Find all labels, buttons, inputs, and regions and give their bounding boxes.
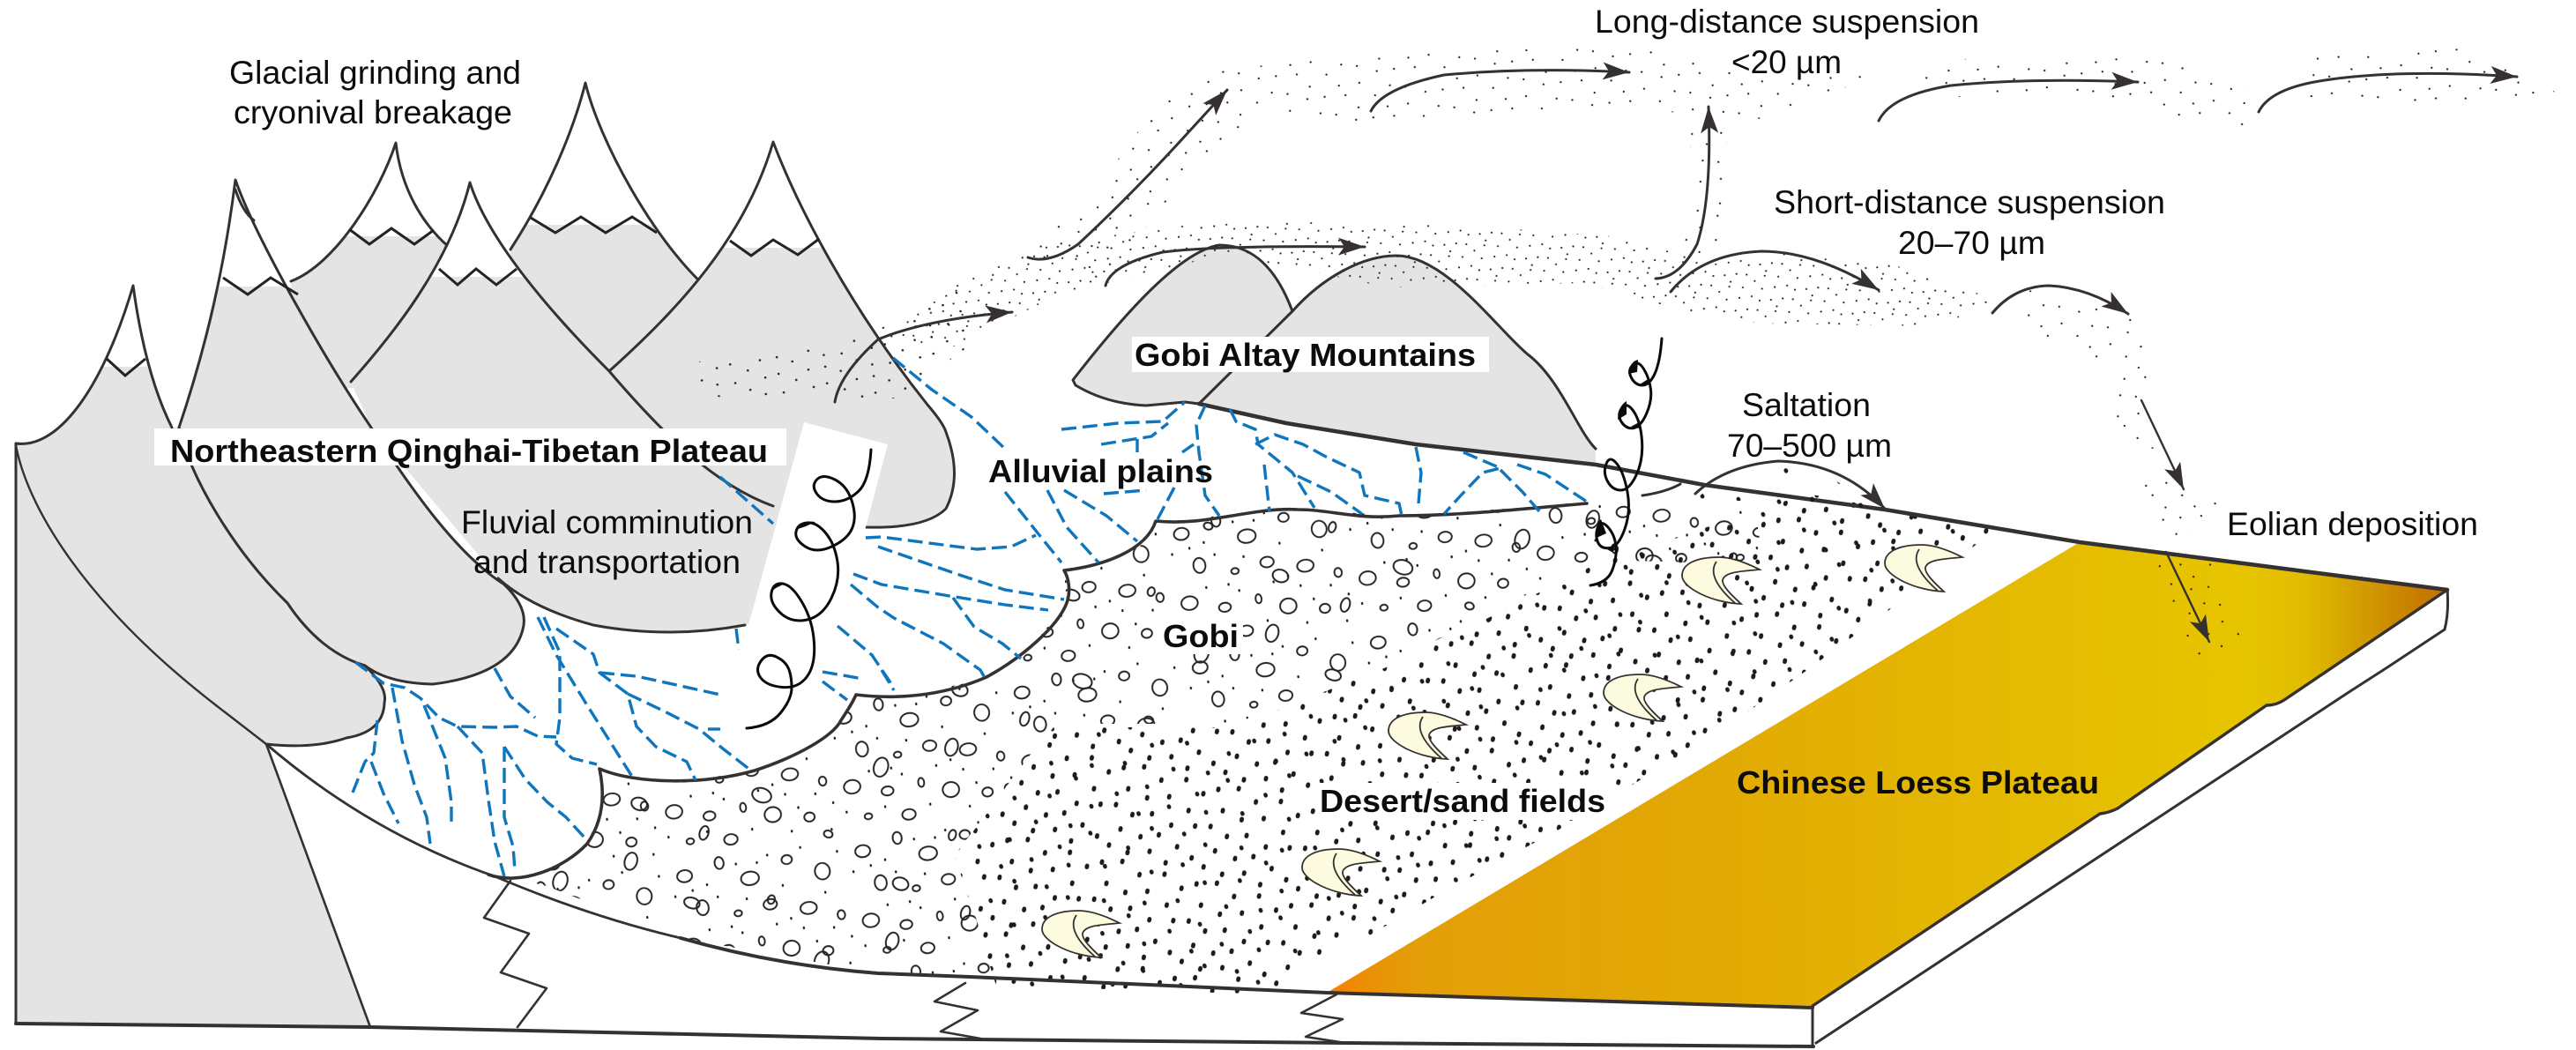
panel: barchan dunes [1042,545,1962,957]
panel: dust cloud - source [699,282,979,398]
arrow: long-distance suspension 1 [1371,71,1629,111]
panel: wind and transport arrows [835,71,2517,642]
arrow: short-distance suspension 2 [1992,286,2128,314]
label: Fluvial comminution and transportation: Fluvial comminution [461,504,753,540]
label: Saltation: 70–500 µm [1727,428,1892,464]
arrow: long-distance suspension 3 [2259,73,2517,112]
label: Short-distance suspension: Short-distance suspension [1774,184,2165,220]
panel: white band behind western whirlwind [748,422,888,639]
arrow: dust rising from plateau [835,312,1012,402]
panel: Northeastern Qinghai-Tibetan Plateau mountains [16,83,954,1027]
label: Chinese Loess Plateau: Chinese Loess Plateau [1737,764,2099,801]
panel: sparse dust - eolian deposition [2133,463,2250,657]
label: Saltation: Saltation [1742,387,1871,423]
label: Short-distance suspension: 20–70 µm [1898,225,2045,261]
icon: eastern whirlwind [1590,339,1662,585]
label: Northeastern Qinghai-Tibetan Plateau: Northeastern Qinghai-Tibetan Plateau [170,433,768,469]
label: Desert/sand fields: Desert/sand fields [1320,783,1605,819]
panel: dust band - short-distance suspension [882,220,1997,346]
label: Gobi: Gobi [1163,618,1239,654]
panel: saltation sand under arc [1697,464,1878,510]
panel: sparse dust - long-distance suspension [1023,48,2565,282]
icon: western whirlwind [747,450,871,728]
panel: gobi gravel field [513,503,1763,979]
arrow: rising to long-distance suspension [1028,90,1227,259]
panel: dust band - falling toward the plateau [2019,287,2157,450]
mountain: back peak centre-left [291,143,449,388]
panel: landscape outlines and slab edges [16,404,2448,1046]
label: Long-distance suspension [1595,4,1979,80]
panel: Chinese Loess Plateau surface [1327,542,2447,1006]
mountain: middle finger [351,182,793,632]
label: Fluvial comminution and transportation [461,504,753,580]
label: Long-distance suspension: <20 µm [1731,44,1842,80]
arrow: settling dust [2141,400,2184,489]
label: Long-distance suspension: Long-distance suspension [1595,4,1979,40]
mountain: front left slope [16,286,385,1027]
panel: desert and sand field dots [955,494,1997,994]
label: Short-distance suspension [1774,184,2165,261]
label: Glacial grinding and cryonival breakage: cryonival breakage [234,94,512,130]
arrow: rising column [1656,107,1709,279]
arrow: eolian deposition [2166,552,2209,642]
arrow: long-distance suspension 2 [1879,80,2138,121]
panel: river network on alluvial plains [351,358,1590,876]
label: Eolian deposition: Eolian deposition [2227,506,2478,542]
arrow: saltation arc [1695,461,1885,509]
label: Alluvial plains: Alluvial plains [988,453,1213,489]
label: Glacial grinding and cryonival breakage [229,55,521,130]
mountain: second finger [179,180,524,684]
panel: Gobi Altay Mountains [1073,245,1596,465]
label: Gobi Altay Mountains: Gobi Altay Mountains [1135,337,1476,373]
arrow: short-distance suspension 1 [1671,251,1879,292]
mountain: back peak centre-right [510,83,705,388]
label: Saltation [1727,387,1892,464]
label: Glacial grinding and cryonival breakage: Glacial grinding and [229,55,521,91]
label: Fluvial comminution and transportation: and transportation [473,544,741,580]
arrow: over Gobi Altay [1106,247,1365,286]
mountain: right finger [609,142,954,529]
